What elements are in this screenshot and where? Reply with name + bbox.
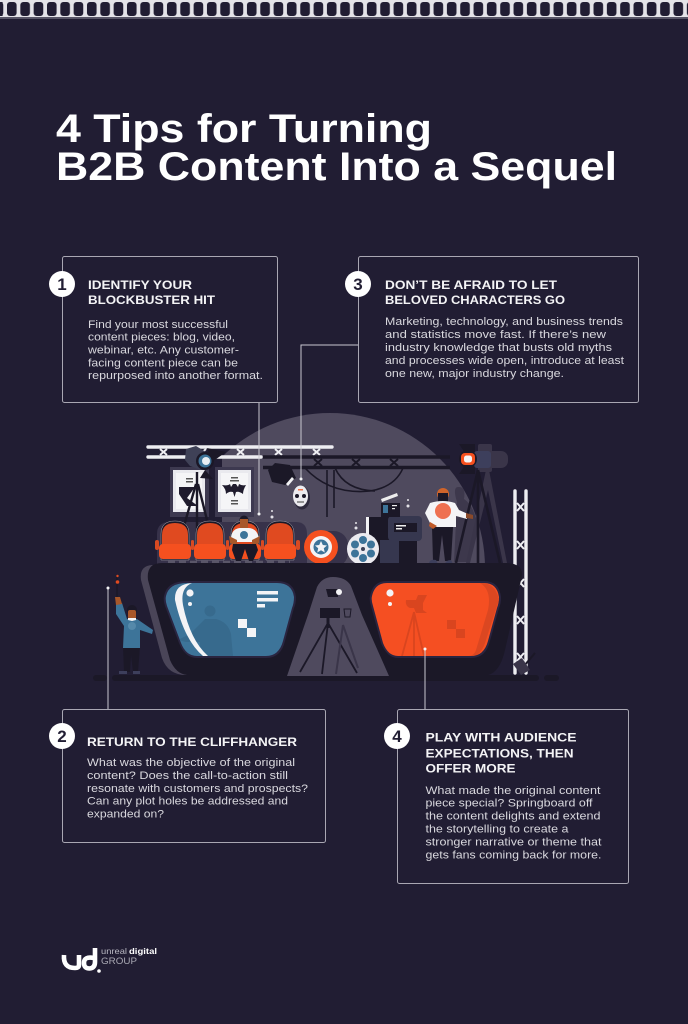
heading tip 2: RETURN TO THE CLIFFHANGER	[87, 735, 297, 749]
number badge 4	[384, 723, 410, 749]
person with wand	[115, 575, 153, 674]
heading tip 4: PLAY WITH AUDIENCE	[426, 731, 576, 745]
number badge 2: 2	[57, 727, 67, 746]
body tip 3: and statistics move fast. If there’s new	[385, 329, 606, 341]
projector	[366, 493, 422, 565]
logo: unreal digital group	[64, 946, 157, 973]
body tip 4: the storytelling to create a	[426, 823, 569, 835]
body tip 1: repurposed into another format.	[88, 370, 263, 382]
number badge 2	[49, 723, 75, 749]
body tip 4: What made the original content	[426, 785, 601, 797]
body tip 2: expanded on?	[87, 808, 164, 820]
title: B2B Content Into a Sequel	[56, 145, 617, 189]
logo: unreal digital group: digital	[129, 946, 157, 956]
poster left	[170, 467, 209, 517]
poster bat	[215, 467, 254, 517]
number badge 1	[49, 271, 75, 297]
heading tip 4: OFFER MORE	[426, 762, 516, 776]
body tip 4: piece special? Springboard off	[426, 798, 593, 810]
shield backing	[310, 531, 348, 567]
title: 4 Tips for Turning	[56, 107, 432, 151]
panel: tip 1	[49, 256, 278, 402]
body tip 2: resonate with customers and prospects?	[87, 783, 308, 795]
standing person shadow	[454, 487, 476, 562]
camera on tripod	[456, 444, 500, 563]
vertical white truss	[515, 491, 526, 673]
number badge 4: 4	[392, 727, 402, 746]
light truss white	[148, 447, 332, 457]
body tip 3	[385, 316, 624, 380]
heading tip 3	[385, 278, 565, 307]
light truss dark	[263, 457, 450, 517]
heading tip 3: DON’T BE AFRAID TO LET	[385, 278, 557, 292]
spotlight backdrop	[222, 413, 485, 563]
logo: unreal digital group: unreal	[101, 946, 127, 956]
film strip border	[0, 0, 688, 18]
tripod camera shadow	[466, 444, 508, 563]
seating riser	[157, 522, 307, 567]
sparkles	[270, 499, 410, 530]
lens: red	[372, 583, 499, 656]
body tip 1: content pieces: blog, video,	[88, 332, 235, 344]
body tip 3: Marketing, technology, and business trends	[385, 316, 623, 328]
number badge 1: 1	[57, 275, 67, 294]
body tip 4: stronger narrative or theme that	[426, 836, 602, 848]
illustration: movie set	[93, 413, 559, 681]
callout lines	[106, 345, 426, 709]
glasses frame	[141, 563, 522, 676]
number badge 3	[345, 271, 371, 297]
theatre chairs	[155, 521, 300, 562]
number badge 3: 3	[353, 275, 363, 294]
shield	[304, 530, 338, 564]
floor bar	[93, 675, 559, 681]
heading tip 1: BLOCKBUSTER HIT	[88, 293, 215, 307]
small floor lamp	[513, 653, 535, 675]
heading tip 3: BELOVED CHARACTERS GO	[385, 293, 565, 307]
body tip 4: the content delights and extend	[426, 810, 601, 822]
body tip 1: webinar, etc. Any customer-	[87, 344, 240, 356]
body tip 3: industry knowledge that busts old myths	[385, 342, 612, 354]
body tip 3: and processes wide open, introduce at least	[385, 355, 624, 367]
heading tip 4: EXPECTATIONS, THEN	[426, 746, 574, 760]
body tip 1	[87, 319, 263, 382]
mask	[293, 486, 310, 510]
body tip 1: Find your most successful	[88, 319, 228, 331]
film reel	[347, 533, 379, 565]
panel: tip 3	[345, 256, 638, 402]
lens: blue	[166, 583, 294, 656]
tripod spotlight	[184, 446, 226, 532]
seated person	[229, 516, 260, 561]
body tip 2: content? Does the call-to-action still	[87, 770, 288, 782]
body tip 2: Can any plot holes be addressed and	[87, 796, 288, 808]
heading tip 1: IDENTIFY YOUR	[88, 278, 192, 292]
panel: tip 2	[49, 710, 326, 842]
hanging lamp	[268, 463, 296, 486]
panel: tip 4	[384, 710, 628, 884]
body tip 4	[426, 785, 602, 861]
logo: unreal digital group: GROUP	[101, 956, 137, 967]
body tip 2: What was the objective of the original	[87, 757, 295, 769]
body tip 3: one new, major industry change.	[385, 368, 564, 380]
body tip 2	[87, 757, 308, 820]
body tip 1: facing content piece can be	[88, 358, 238, 370]
heading tip 1	[88, 278, 215, 307]
heading tip 4	[426, 731, 576, 776]
title	[56, 107, 617, 189]
body tip 4: gets fans coming back for more.	[426, 849, 602, 861]
standing person	[425, 488, 473, 564]
nose camera	[300, 589, 358, 674]
